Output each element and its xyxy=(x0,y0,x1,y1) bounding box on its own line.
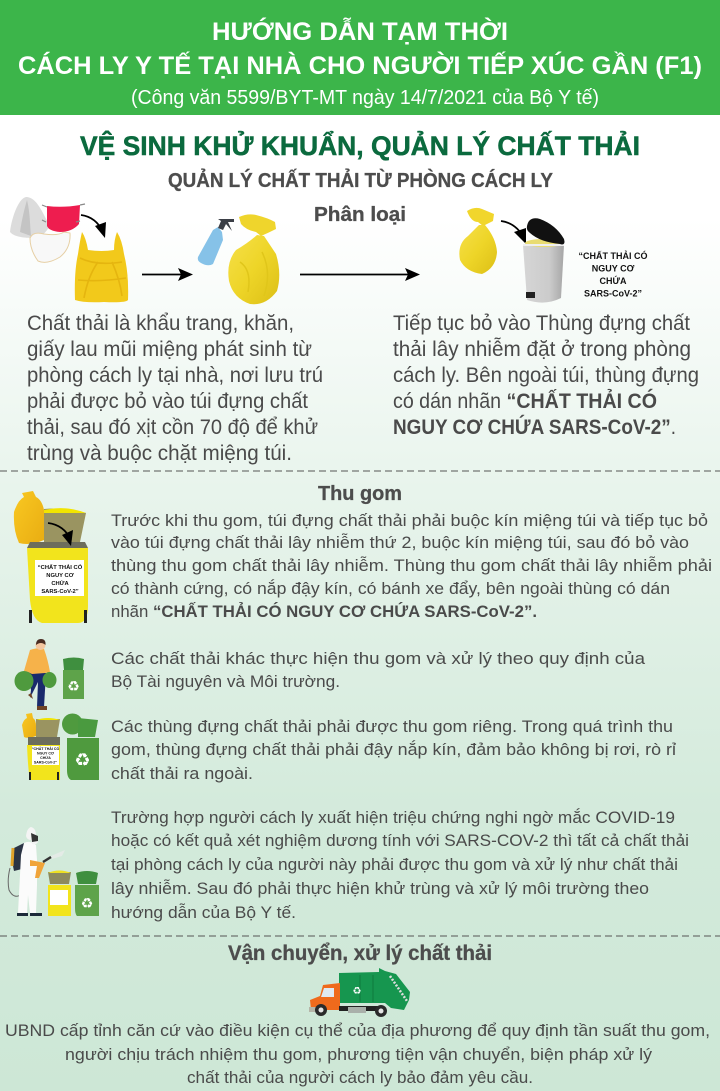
bin label xyxy=(578,250,648,298)
text block: other waste: Bộ Tài nguyên và Môi trường. xyxy=(111,672,340,691)
main heading: VỆ SINH KHỬ KHUẨN, QUẢN LÝ CHẤT THẢI xyxy=(80,129,640,161)
title line 1: HƯỚNG DẪN TẠM THỜI xyxy=(212,16,508,46)
title line 2: CÁCH LY Y TẾ TẠI NHÀ CHO NGƯỜI TIẾP XÚC GẦN (F1) xyxy=(18,50,702,80)
bin label: SARS-CoV-2” xyxy=(584,288,642,298)
text block: positive case: lây nhiễm. Sau đó phải thực hiện khử trùng và xử lý môi trường theo xyxy=(111,879,649,898)
text block: collection steps: thùng thu gom chất thải lây nhiễm. Thùng thu gom chất thải lây nhiễm phải xyxy=(111,556,712,575)
text block: transport rules: UBND cấp tỉnh căn cứ vào điều kiện cụ thể của địa phương để quy định tần suất thu gom, xyxy=(5,1021,710,1040)
source note: (Công văn 5599/BYT-MT ngày 14/7/2021 của Bộ Y tế) xyxy=(131,87,599,109)
icon: disinfection worker and bins xyxy=(8,827,99,916)
icon: yellow and green bins: ♻ xyxy=(74,750,91,770)
bins xyxy=(48,872,71,884)
mini label: “CHẤT THẢI CÓ xyxy=(32,746,59,751)
text block: positive case: tại phòng cách ly của người này phải được thu gom và xử lý như chất thải xyxy=(111,855,678,874)
text block: infectious bin xyxy=(393,312,699,439)
arrow xyxy=(300,268,420,281)
text block: transport rules: chất thải của người cách ly bảo đảm yêu cầu. xyxy=(187,1068,533,1087)
text block: waste handling: trùng và buộc chặt miệng túi. xyxy=(27,442,292,465)
text block: separate collection xyxy=(111,717,676,783)
heading: Phân loại: Phân loại xyxy=(314,204,406,226)
icon: yellow collection bin xyxy=(14,491,88,623)
icon: yellow and green bins: NGUY CƠ xyxy=(37,752,55,756)
bin label: NGUY CƠ xyxy=(592,264,635,274)
label: “CHẤT THẢI CÓ xyxy=(38,563,83,571)
text block: separate collection: chất thải ra ngoài. xyxy=(111,764,253,783)
bin xyxy=(523,245,564,303)
text block: infectious bin: NGUY CƠ CHỨA SARS-CoV-2”. xyxy=(393,415,676,439)
icon: disinfection worker and bins: ♻ xyxy=(81,895,93,911)
text block: collection steps: nhãn “CHẤT THẢI CÓ NGUY CƠ CHỨA SARS-CoV-2”. xyxy=(111,602,537,621)
sub heading: QUẢN LÝ CHẤT THẢI TỪ PHÒNG CÁCH LY xyxy=(168,168,554,192)
icon: yellow collection bin: NGUY CƠ xyxy=(46,573,74,579)
text block: positive case: Trường hợp người cách ly xuất hiện triệu chứng nghi ngờ mắc COVID-19 xyxy=(111,808,675,827)
text block: waste handling: thải, sau đó xịt cồn 70 độ để khử xyxy=(27,416,318,439)
icon: yellow and green bins: SARS-CoV-2” xyxy=(34,760,57,764)
arrow xyxy=(81,215,103,232)
arrow xyxy=(501,221,524,238)
arrow xyxy=(48,523,71,540)
text block: waste handling: giấy lau mũi miệng phát sinh từ xyxy=(27,338,312,361)
icon: garbage truck xyxy=(309,968,410,1017)
text block: positive case xyxy=(111,808,689,922)
icon: tied bag and gray bin xyxy=(459,208,564,303)
icon: garbage truck: ♻ xyxy=(353,986,362,997)
icon: yellow collection bin: SARS-CoV-2” xyxy=(41,589,79,595)
text block: waste handling: Chất thải là khẩu trang, khăn, xyxy=(27,312,294,335)
icon: spray bottle and tied bag xyxy=(198,214,279,304)
heading: transport: Vận chuyển, xử lý chất thải xyxy=(228,942,492,965)
text block: collection steps: có thành cứng, có nắp đậy kín, có bánh xe đẩy, bên ngoài thùng có dán xyxy=(111,579,670,598)
text block: infectious bin: thải lây nhiễm đặt ở trong phòng xyxy=(393,338,691,361)
text block: positive case: hoặc có kết quả xét nghiệm dương tính với SARS-COV-2 thì tất cả chất thải xyxy=(111,831,689,850)
icon: yellow and green bins xyxy=(22,713,99,780)
header banner xyxy=(0,0,720,115)
icon: yellow collection bin: CHỨA xyxy=(51,580,69,587)
bin label: “CHẤT THẢI CÓ xyxy=(578,250,648,261)
bin label: CHỨA xyxy=(600,275,627,286)
heading: Thu gom: Thu gom xyxy=(318,483,402,505)
text block: collection steps: vào túi đựng chất thải lây nhiễm thứ 2, buộc kín miệng túi, sau đó bỏ vào xyxy=(111,533,689,552)
icon: yellow and green bins: CHỨA xyxy=(40,755,51,760)
arrow xyxy=(142,268,193,281)
text block: waste handling xyxy=(27,312,323,465)
text block: infectious bin: Tiếp tục bỏ vào Thùng đựng chất xyxy=(393,312,690,335)
icon: person carrying bags: ♻ xyxy=(67,678,80,694)
text block: other waste xyxy=(111,649,646,691)
icon: cloth, masks and yellow bag xyxy=(10,197,128,302)
text block: other waste: Các chất thải khác thực hiện thu gom và xử lý theo quy định của xyxy=(111,649,646,668)
text block: infectious bin: cách ly. Bên ngoài túi, thùng đựng xyxy=(393,364,699,387)
icon: person carrying bags xyxy=(14,639,84,710)
text block: waste handling: phải được bỏ vào túi đựng chất xyxy=(27,390,308,413)
text block: collection steps: Trước khi thu gom, túi đựng chất thải phải buộc kín miệng túi và tiếp tục bỏ xyxy=(111,511,708,530)
text block: transport rules: người chịu trách nhiệm thu gom, phương tiện vận chuyển, biện pháp xử lý xyxy=(65,1045,653,1064)
text block: separate collection: Các thùng đựng chất thải phải được thu gom riêng. Trong quá trình thu xyxy=(111,717,673,736)
text block: infectious bin: có dán nhãn “CHẤT THẢI CÓ xyxy=(393,389,657,413)
text block: separate collection: gom, thùng đựng chất thải phải đậy nắp kín, đảm bảo không bị rơi, rò rỉ xyxy=(111,740,676,759)
text block: collection steps xyxy=(111,511,712,621)
green bin xyxy=(63,658,84,670)
text block: waste handling: phòng cách ly tại nhà, nơi lưu trú xyxy=(27,364,323,387)
text block: positive case: hướng dẫn của Bộ Y tế. xyxy=(111,903,296,922)
text block: transport rules xyxy=(5,1021,710,1087)
